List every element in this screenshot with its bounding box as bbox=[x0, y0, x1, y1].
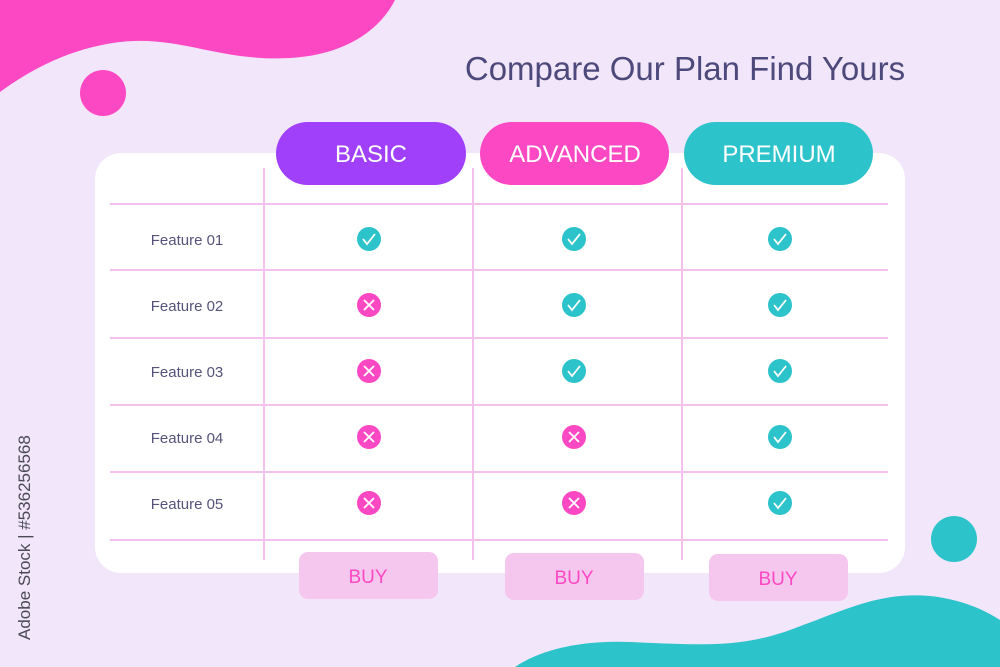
button: buy advanced bbox=[505, 553, 644, 600]
icons: premium column bbox=[768, 227, 792, 515]
button: buy premium: BUY bbox=[758, 569, 798, 590]
header: BASIC bbox=[276, 122, 466, 185]
watermark vertical text: Adobe Stock | #536256568 bbox=[15, 435, 34, 640]
feature labels: Feature 02 bbox=[151, 298, 223, 315]
title: Compare Our Plan Find Yours bbox=[465, 50, 905, 87]
icons: advanced column bbox=[562, 227, 586, 515]
feature labels bbox=[151, 232, 223, 513]
header: ADVANCED: ADVANCED bbox=[509, 141, 641, 168]
button: buy basic bbox=[299, 552, 438, 599]
button: buy premium bbox=[709, 554, 848, 601]
header: PREMIUM: PREMIUM bbox=[722, 141, 836, 168]
header: ADVANCED bbox=[480, 122, 669, 185]
header: PREMIUM bbox=[684, 122, 873, 185]
feature labels: Feature 04 bbox=[151, 430, 223, 447]
icons: basic column bbox=[357, 227, 381, 515]
decoration: pink circle bbox=[80, 70, 126, 116]
feature labels: Feature 01 bbox=[151, 232, 223, 249]
decoration: teal circle bbox=[931, 516, 977, 562]
header: BASIC: BASIC bbox=[335, 141, 407, 168]
decoration: teal wave bottom-right bbox=[515, 595, 1000, 667]
feature labels: Feature 03 bbox=[151, 364, 223, 381]
button: buy advanced: BUY bbox=[554, 568, 594, 589]
decoration: pink blob top-left bbox=[0, 0, 395, 92]
panel: comparison table bbox=[95, 153, 905, 573]
feature labels: Feature 05 bbox=[151, 496, 223, 513]
button: buy basic: BUY bbox=[348, 567, 388, 588]
